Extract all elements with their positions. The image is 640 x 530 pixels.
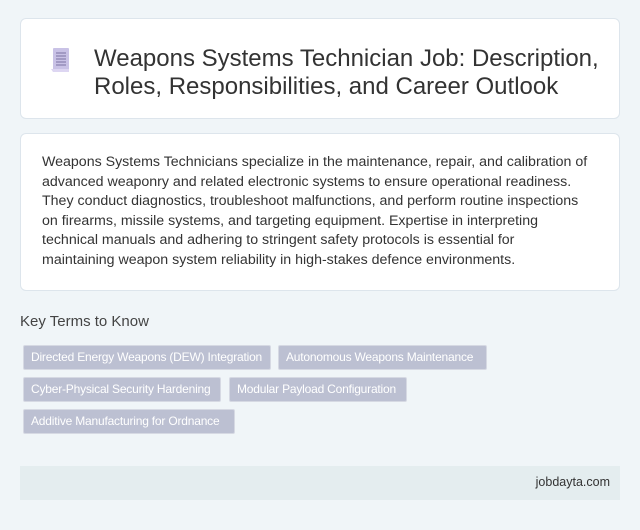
description text: technical manuals and adhering to stringent safety protocols is essential for [42, 232, 514, 248]
tag [23, 409, 235, 434]
footer [20, 466, 620, 500]
tags [23, 345, 487, 434]
description text: on firearms, missile systems, and targeting equipment. Expertise in interpreting [42, 212, 538, 228]
heading: key terms: Key Terms to Know [20, 313, 149, 330]
tag [278, 345, 487, 370]
tag: Autonomous Weapons Maintenance [286, 350, 473, 364]
tag [23, 345, 271, 370]
description text: Weapons Systems Technicians specialize in the maintenance, repair, and calibration of [42, 154, 587, 170]
tag: Modular Payload Configuration [237, 382, 396, 396]
description text: advanced weaponry and related electronic systems to ensure operational readiness. [42, 174, 571, 190]
description text: They conduct diagnostics, troubleshoot malfunctions, and perform routine inspections [42, 193, 578, 209]
title: Weapons Systems Technician Job: Description, Roles, Responsibilities, and Career Outlook [94, 45, 599, 100]
tag [23, 377, 221, 402]
tag: Cyber-Physical Security Hardening [31, 382, 210, 396]
header card [20, 18, 620, 119]
description text [42, 154, 588, 268]
description card [20, 133, 620, 291]
tag [229, 377, 407, 402]
description text: maintaining weapon system reliability in high-stakes defence environments. [42, 252, 515, 268]
icon: document [51, 48, 69, 72]
tag: Additive Manufacturing for Ordnance [31, 414, 219, 428]
tag: Directed Energy Weapons (DEW) Integration [31, 350, 262, 364]
footer text: jobdayta.com [536, 475, 610, 489]
